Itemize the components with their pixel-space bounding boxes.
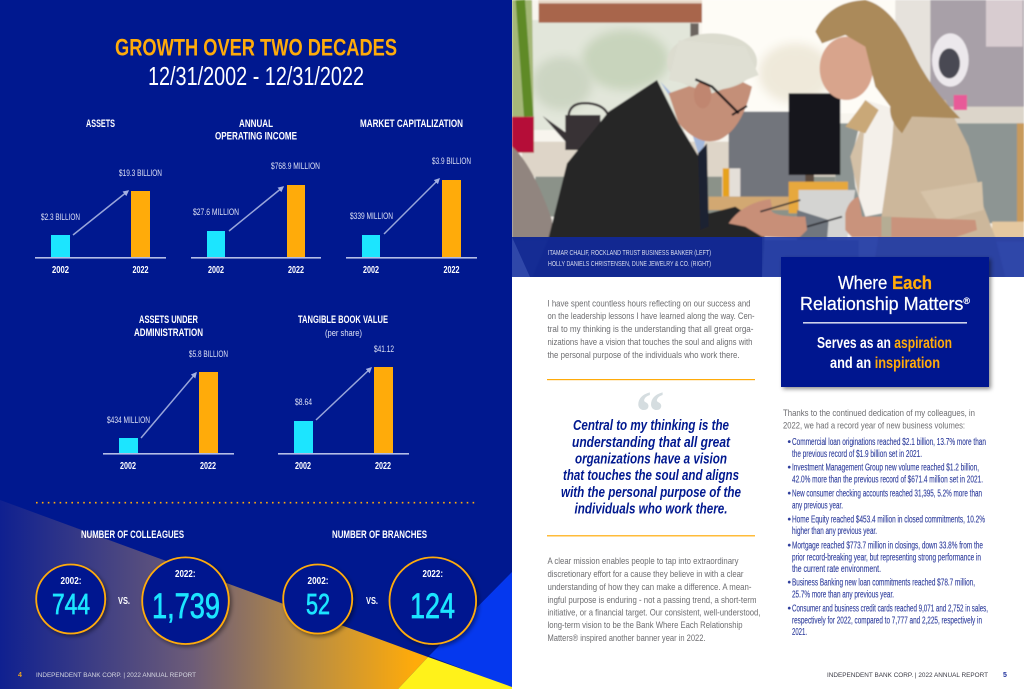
chart: tangible book value: 2022 — [375, 461, 391, 472]
circle: 124 branches in 2022: 2022: — [422, 569, 443, 580]
chart: annual operating income: ANNUAL — [239, 118, 273, 130]
callout: where each relationship matters: Serves as an aspiration — [817, 335, 952, 352]
bullet list: business volumes: • — [788, 488, 792, 500]
icon: quotation mark: “ — [636, 379, 664, 444]
bullet list: business volumes: any previous year. — [792, 500, 843, 512]
bullet list: business volumes: • — [788, 462, 792, 474]
chart: tangible book value: $8.64 — [295, 397, 312, 408]
photo: banker and client looking at jewelry — [512, 0, 1024, 277]
chart: tangible book value: 2002 — [295, 461, 311, 472]
stat: number of colleagues: NUMBER OF COLLEAGUES — [81, 529, 184, 541]
circle: 52 branches in 2002: 52 — [306, 589, 330, 621]
chart: assets under administration: $5.8 BILLION — [189, 349, 228, 360]
chart: assets: 2002 — [52, 265, 69, 276]
background wedge: yellow — [398, 657, 512, 689]
text block: record year intro: 2022, we had a record year of new business volumes: — [783, 420, 965, 430]
stat: number of colleagues — [36, 529, 229, 644]
bullet list: business volumes: • — [788, 514, 792, 526]
text block: mission paragraph: discretionary effort for a cause they believe in with a clear — [548, 569, 744, 579]
chart: annual operating income: 2002 — [208, 265, 224, 276]
chart: assets: $19.3 BILLION — [119, 168, 162, 179]
chart: market capitalization: $339 MILLION — [350, 211, 393, 222]
text block: record year intro: Thanks to the continued dedication of my colleagues, in — [783, 408, 975, 418]
chart: assets: 2022 — [132, 265, 149, 276]
chart: market capitalization: $3.9 BILLION — [432, 156, 471, 167]
man — [548, 80, 766, 261]
text block: opening paragraph — [548, 298, 754, 360]
bullet list: business volumes: • — [788, 578, 792, 588]
chart: assets: $2.3 BILLION — [41, 212, 80, 223]
stat: number of branches: NUMBER OF BRANCHES — [332, 529, 427, 541]
circle: 52 branches in 2002 — [283, 564, 352, 634]
circle: 1,739 colleagues in 2022: 2022: — [175, 569, 196, 580]
text block: opening paragraph: tral to my thinking is the understanding that all great orga- — [548, 324, 754, 334]
callout: where each relationship matters: ® — [963, 296, 970, 306]
photo caption: ITAMAR CHALIF, ROCKLAND TRUST BUSINESS BANKER (LEFT) — [548, 248, 711, 257]
chart: assets under administration — [103, 314, 234, 472]
callout: where each relationship matters — [781, 257, 989, 387]
circle: 744 colleagues in 2002: 2002: — [60, 576, 82, 587]
footer: left page: 4 — [18, 672, 22, 679]
text block: mission paragraph: Matters® inspired another banner year in 2022. — [548, 633, 706, 643]
circle: 124 branches in 2022: 124 — [410, 587, 455, 626]
chart: tangible book value — [278, 314, 409, 472]
chart: market capitalization — [346, 118, 477, 276]
text block: mission paragraph: ingful purpose is enduring - not a passing trend, a short-term — [548, 595, 757, 605]
date range subtitle: 12/31/2002 - 12/31/2022 — [148, 61, 364, 91]
text block: mission paragraph: A clear mission enables people to tap into extraordinary — [548, 556, 739, 566]
bullet list: business volumes: 2021. — [792, 627, 807, 638]
footer: right page: 5 — [1003, 672, 1007, 679]
text block: opening paragraph: the personal purpose of the individuals who work there. — [548, 350, 740, 360]
chart: annual operating income: $768.9 MILLION — [271, 161, 320, 172]
chart: assets — [35, 118, 166, 276]
woman — [854, 102, 894, 218]
text block: mission paragraph: understanding of how they can make a difference. A mean- — [548, 582, 752, 592]
pull quote: with the personal purpose of the — [561, 485, 741, 501]
panel: white report page — [512, 0, 1024, 689]
chart: tangible book value: (per share) — [325, 328, 362, 339]
pull quote: organizations have a vision — [575, 452, 727, 468]
stat: number of branches: VS. — [366, 596, 378, 607]
chart: market capitalization: 2022 — [444, 265, 460, 276]
text block: mission paragraph: initiative, or a financial target. Our consistent, well-understood, — [548, 608, 760, 618]
chart: tangible book value: TANGIBLE BOOK VALUE — [298, 314, 388, 326]
chart: assets under administration: ADMINISTRATION — [134, 327, 203, 339]
bullet list: business volumes: the current rate environment. — [792, 564, 881, 575]
caption band — [512, 237, 1024, 277]
footer: left page: INDEPENDENT BANK CORP. | 2022 ANNUAL REPORT — [36, 672, 196, 679]
bullet list: business volumes: • — [788, 540, 792, 552]
chart: tangible book value: $41.12 — [374, 344, 394, 355]
text block: opening paragraph: I have spent countless hours reflecting on our success and — [548, 298, 750, 308]
circle: 124 branches in 2022 — [390, 557, 476, 644]
bullet list: business volumes: • — [788, 437, 792, 448]
callout: where each relationship matters: Where Each — [838, 273, 932, 293]
title: GROWTH OVER TWO DECADES — [115, 34, 397, 62]
photo caption — [548, 248, 711, 268]
text block: opening paragraph: on the leadership lessons I have learned along the way. Cen- — [548, 311, 754, 321]
panel: growth over two decades — [0, 0, 512, 689]
text block: mission paragraph: long-term vision to be the Bank Where Each Relationship — [548, 620, 742, 630]
photo caption: HOLLY DANIELS CHRISTENSEN, DUNE JEWELRY & CO. (RIGHT) — [548, 259, 711, 268]
bullet list: business volumes: the previous record of $1.9 billion set in 2021. — [792, 449, 922, 460]
background wedge: gradient — [0, 500, 428, 689]
pull quote: understanding that all great — [572, 435, 731, 451]
circle: 744 colleagues in 2002: 744 — [52, 589, 90, 621]
chart: assets under administration: $434 MILLION — [107, 415, 150, 426]
bullet list: business volumes: 25.7% more than any previous year. — [792, 590, 894, 600]
pull quote: individuals who work there. — [574, 502, 728, 518]
chart: annual operating income — [191, 118, 321, 276]
chart: assets under administration: ASSETS UNDER — [139, 314, 198, 326]
chart: market capitalization: MARKET CAPITALIZATION — [360, 118, 463, 130]
chart: annual operating income: OPERATING INCOME — [215, 130, 297, 142]
bullet list: business volumes — [788, 437, 988, 638]
text block: record year intro — [783, 408, 975, 430]
circle: 52 branches in 2002: 2002: — [308, 576, 328, 587]
chart: market capitalization: 2002 — [363, 265, 379, 276]
chart: annual operating income: 2022 — [288, 265, 304, 276]
bullet list: business volumes: • — [788, 604, 792, 614]
stat: number of colleagues: VS. — [118, 596, 130, 607]
chart: assets under administration: 2022 — [200, 461, 216, 472]
text block: mission paragraph — [548, 556, 760, 643]
chart: annual operating income: $27.6 MILLION — [193, 207, 239, 218]
pull quote: Central to my thinking is the — [573, 418, 729, 434]
stat: number of branches — [283, 529, 476, 644]
callout: where each relationship matters: Relationship Matters — [800, 294, 964, 314]
background wedge: bright blue — [429, 572, 512, 688]
text block: opening paragraph: nizations have a vision that touches the soul and aligns with — [548, 337, 752, 347]
circle: 1,739 colleagues in 2022: 1,739 — [152, 587, 220, 626]
pull quote: that touches the soul and aligns — [563, 468, 739, 484]
footer: right page: INDEPENDENT BANK CORP. | 2022 ANNUAL REPORT — [827, 672, 988, 679]
circle: 744 colleagues in 2002 — [36, 564, 105, 634]
bullet list: business volumes: higher than any previous year. — [792, 526, 877, 537]
callout: where each relationship matters: and an inspiration — [830, 355, 940, 372]
chart: assets under administration: 2002 — [120, 461, 136, 472]
pull quote — [561, 379, 741, 518]
chart: assets: ASSETS — [86, 118, 115, 130]
circle: 1,739 colleagues in 2022 — [142, 557, 229, 644]
